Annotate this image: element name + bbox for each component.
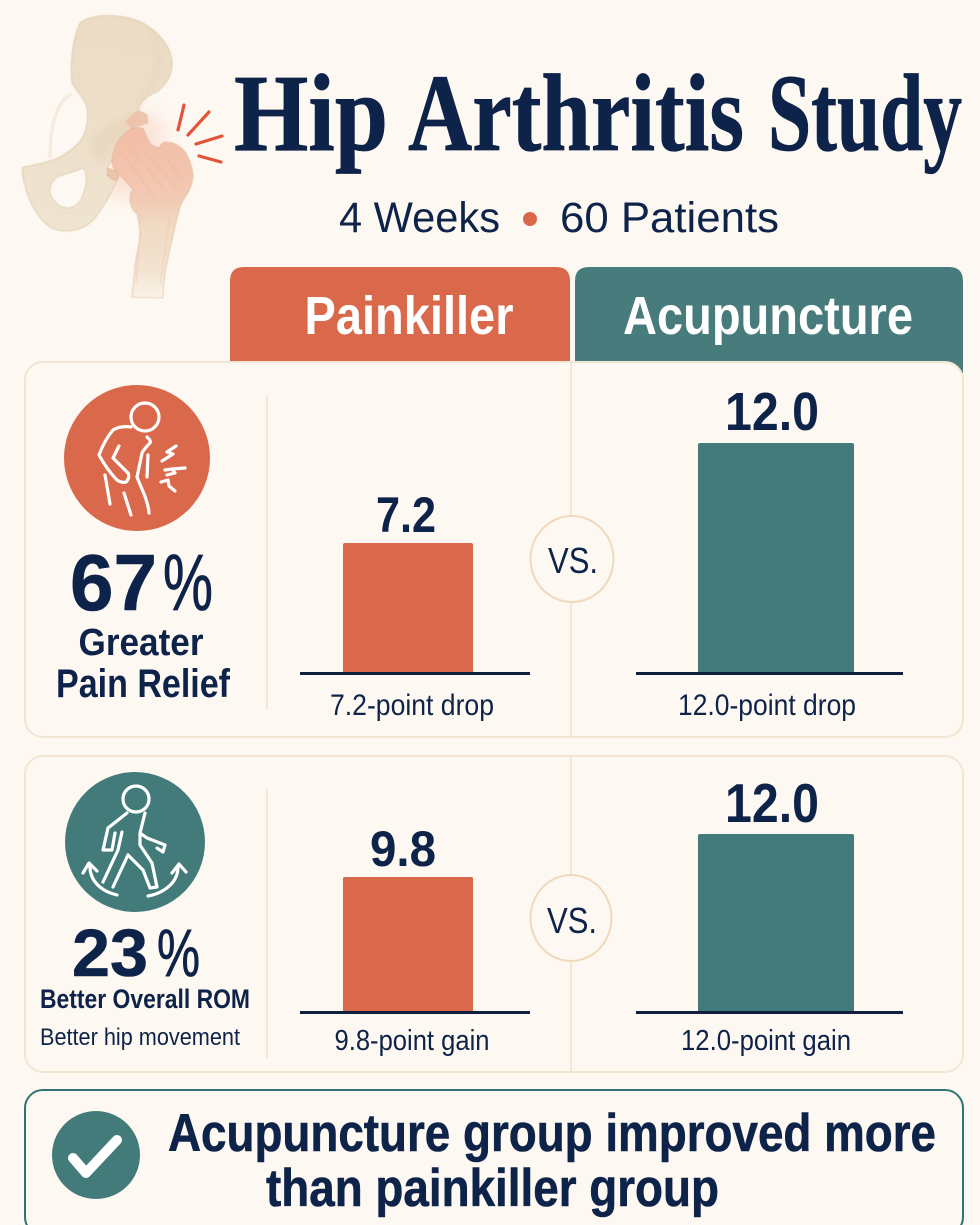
label: greater pain relief: Pain Relief xyxy=(56,662,231,706)
pain marks xyxy=(178,105,222,162)
bar chart: painkiller pain xyxy=(300,487,530,722)
stat: 23%: % xyxy=(157,916,200,991)
label: greater pain relief xyxy=(56,622,231,706)
bar chart: acupuncture rom: 12.0-point gain xyxy=(681,1025,851,1057)
title: Hip xyxy=(234,52,388,174)
stat: 23%: 23 xyxy=(72,916,148,991)
bar chart: acupuncture pain: 12.0 xyxy=(725,382,819,442)
vs badge: VS. xyxy=(547,900,597,941)
title: Arthritis xyxy=(408,52,744,174)
conclusion text: than painkiller group xyxy=(266,1159,719,1218)
bar chart: painkiller rom xyxy=(300,821,530,1057)
illustration: hip joint xyxy=(22,15,222,298)
bar chart: painkiller pain: 7.2-point drop xyxy=(330,689,494,722)
bar chart: acupuncture rom: 12.0 xyxy=(725,772,819,834)
conclusion text xyxy=(168,1104,936,1218)
label: better hip movement: Better hip movement xyxy=(40,1024,240,1051)
subtitle: 4 Weeks xyxy=(339,194,500,242)
icon: check mark xyxy=(52,1111,140,1199)
icon: walking person xyxy=(65,772,205,912)
bar chart: acupuncture pain: 12.0-point drop xyxy=(678,689,856,722)
bar chart: painkiller rom: 9.8 xyxy=(370,821,436,877)
subtitle xyxy=(339,194,779,242)
icon: person with back pain xyxy=(64,385,210,531)
bar chart: painkiller pain: 7.2 xyxy=(376,487,436,543)
header: painkiller: Painkiller xyxy=(304,286,514,346)
bar chart: acupuncture rom xyxy=(636,772,903,1057)
vs badge xyxy=(530,875,612,961)
panel: range of motion xyxy=(25,756,963,1072)
header: acupuncture xyxy=(575,267,963,375)
header: acupuncture: Acupuncture xyxy=(623,286,913,346)
vs badge: VS. xyxy=(548,540,598,581)
stat: 67%: % xyxy=(163,538,213,627)
title xyxy=(234,52,962,174)
header: painkiller xyxy=(230,267,570,362)
label: greater pain relief: Greater xyxy=(78,622,204,664)
bar chart: acupuncture pain xyxy=(636,382,903,722)
femur xyxy=(112,128,193,298)
conclusion banner xyxy=(25,1090,963,1225)
stat: 67%: 67 xyxy=(70,538,157,627)
subtitle: 60 Patients xyxy=(560,194,779,242)
vs badge xyxy=(530,516,614,602)
stat: 67% xyxy=(70,538,213,627)
pelvis xyxy=(22,15,172,231)
stat: 23% xyxy=(72,916,200,991)
panel: pain relief xyxy=(25,362,963,737)
bar chart: painkiller rom: 9.8-point gain xyxy=(334,1025,490,1057)
label: better overall rom: Better Overall ROM xyxy=(40,984,250,1014)
